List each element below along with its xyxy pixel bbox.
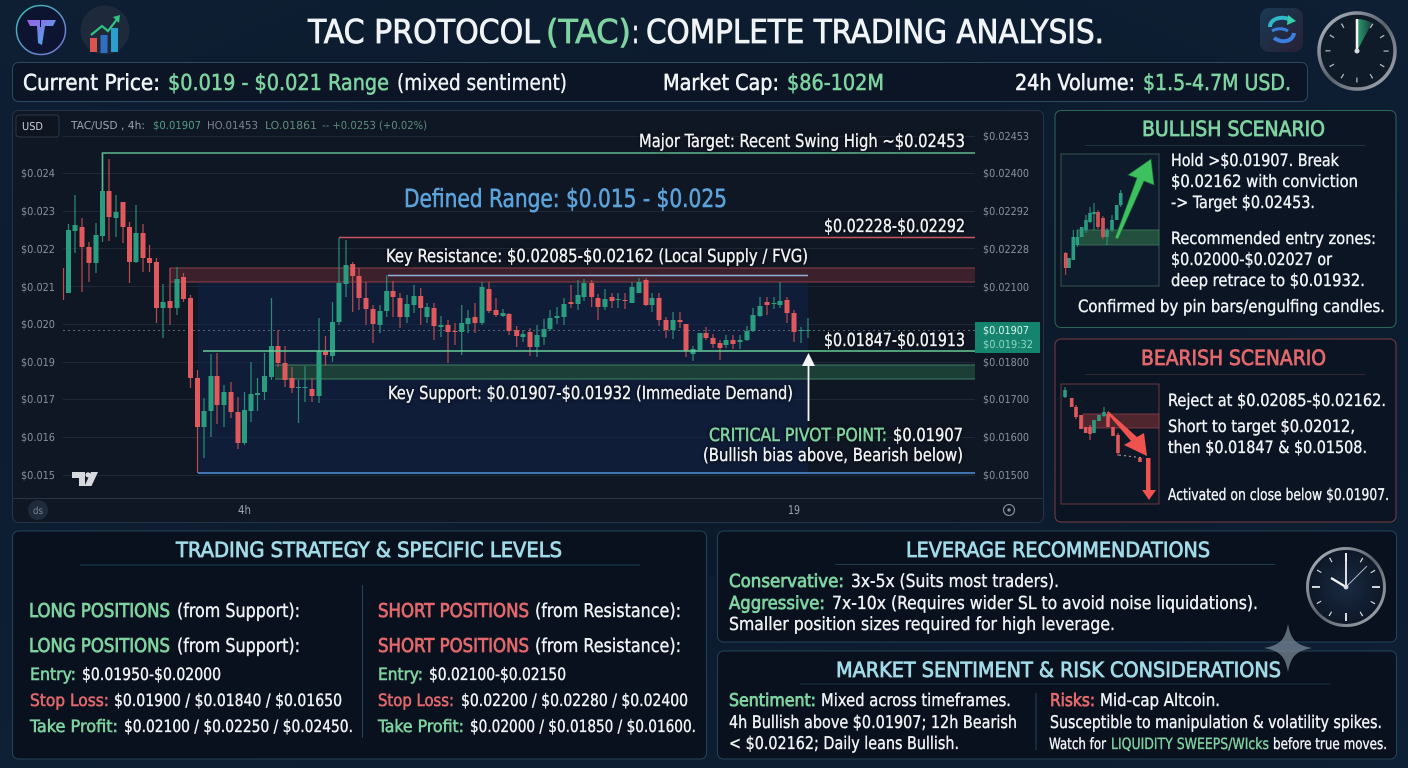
label: major target: Major Target: Recent Swing High ~$0.02453 xyxy=(639,131,965,152)
column: short positions xyxy=(377,600,696,737)
text: leverage tiers: Conservative: xyxy=(729,571,844,592)
text: bullish plan: Confirmed by pin bars/engulfing candles. xyxy=(1078,297,1385,317)
text: leverage tiers: Aggressive: xyxy=(729,593,825,614)
heading: bearish: BEARISH SCENARIO xyxy=(1141,346,1326,370)
column: long positions: (from Support): xyxy=(177,635,300,657)
right price axis: $0.01800 xyxy=(983,356,1029,369)
column: short positions: SHORT POSITIONS xyxy=(378,600,529,622)
panel: bearish scenario xyxy=(1055,339,1396,522)
chart ticker header: LO.01861 xyxy=(265,119,317,132)
candlesticks xyxy=(64,153,808,473)
chart ticker header: $0.01907 xyxy=(153,119,201,132)
panel: price summary bar: $86-102M xyxy=(787,71,884,96)
left price axis xyxy=(21,167,55,482)
right price axis: $0.02400 xyxy=(983,167,1029,180)
icon: sparkle star xyxy=(1264,624,1312,672)
chart ticker header: TAC/USD , 4h: xyxy=(70,119,145,132)
panel: price summary bar: 24h Volume: xyxy=(1015,71,1135,96)
right price axis: $0.02100 xyxy=(983,281,1029,294)
column: long positions xyxy=(29,600,353,737)
column: short positions: Entry: xyxy=(378,665,423,685)
text: bearish plan xyxy=(1168,391,1389,504)
panel: price chart xyxy=(12,110,1044,522)
heading: sentiment and risk: MARKET SENTIMENT & RISK CONSIDERATIONS xyxy=(836,658,1281,682)
left price axis: $0.019 xyxy=(21,356,55,369)
column: long positions: Entry: xyxy=(30,665,76,685)
time axis: ds xyxy=(33,506,43,517)
panel: market sentiment and risk xyxy=(718,651,1396,759)
right price axis xyxy=(983,130,1029,482)
chart ticker header: -- +0.0253 (+0.02%) xyxy=(322,119,427,132)
icon: gauge dial xyxy=(1319,13,1395,89)
panel: trading strategy xyxy=(12,531,706,759)
time axis xyxy=(28,500,1014,520)
defined range shading xyxy=(198,283,808,473)
text: risks: Watch for xyxy=(1049,735,1106,753)
left price axis: $0.015 xyxy=(21,469,55,482)
arrow: bearish drop xyxy=(1142,458,1156,500)
text: risks: Risks: xyxy=(1050,691,1095,711)
currency selector: USD xyxy=(22,120,43,133)
mini chart: bearish breakdown xyxy=(1061,384,1159,504)
text: risks: before true moves. xyxy=(1273,735,1387,753)
panel: leverage recommendations xyxy=(718,531,1396,642)
callout: critical pivot point: $0.01907 xyxy=(893,425,963,446)
text: sentiment: Mixed across timeframes. xyxy=(821,691,1011,711)
column: short positions: SHORT POSITIONS xyxy=(378,635,529,657)
title: : xyxy=(632,12,639,51)
text: bullish plan xyxy=(1078,151,1385,317)
text: sentiment xyxy=(729,691,1017,754)
icon: refresh app xyxy=(1260,8,1303,52)
label: key resistance: Key Resistance: $0.02085-$0.02162 (Local Supply / FVG) xyxy=(386,246,808,267)
icon: growth bar chart xyxy=(80,6,130,54)
title: TAC PROTOCOL xyxy=(307,12,540,51)
column: long positions: $0.01900 / $0.01840 / $0.01650 xyxy=(114,691,342,711)
right price axis: $0.02228 xyxy=(983,243,1029,256)
callout: critical pivot point: (Bullish bias above, Bearish below) xyxy=(703,445,963,466)
column: long positions: LONG POSITIONS xyxy=(29,635,170,657)
text: sentiment: Sentiment: xyxy=(729,691,816,711)
label: upper resistance: $0.02228-$0.02292 xyxy=(824,216,965,237)
logo: TAC token xyxy=(16,6,66,54)
title: (TAC) xyxy=(546,12,631,51)
text: sentiment: 4h Bullish above $0.01907; 12h Bearish xyxy=(729,713,1017,733)
label: defined range: Defined Range: $0.015 - $0.025 xyxy=(404,184,727,213)
left price axis: $0.023 xyxy=(21,205,55,218)
text: bullish plan: Hold >$0.01907. Break xyxy=(1171,151,1339,171)
left price axis: $0.021 xyxy=(21,281,55,294)
column: short positions: $0.02100-$0.02150 xyxy=(429,665,566,685)
left price axis: $0.016 xyxy=(21,431,55,444)
panel: price summary bar: $1.5-4.7M USD. xyxy=(1143,71,1291,96)
heading: bullish: BULLISH SCENARIO xyxy=(1142,117,1325,141)
arrow: bearish reject xyxy=(1107,411,1147,456)
panel: bullish scenario xyxy=(1055,110,1396,328)
arrow: bullish xyxy=(1115,159,1154,239)
icon: clock xyxy=(1308,548,1384,626)
left price axis: $0.017 xyxy=(21,393,55,406)
text: leverage tiers: 3x-5x (Suits most traders). xyxy=(851,571,1059,592)
right price axis: $0.01500 xyxy=(983,469,1029,482)
panel: price summary bar xyxy=(12,62,1308,102)
column: short positions: (from Resistance): xyxy=(535,635,681,657)
text: bullish plan: -> Target $0.02453. xyxy=(1171,193,1315,213)
panel: price summary bar: $0.019 - $0.021 Range xyxy=(168,71,389,96)
pivot line xyxy=(203,350,975,352)
current price tag: $0.01907 xyxy=(983,324,1029,337)
column: long positions: Take Profit: xyxy=(29,717,118,737)
panel: price summary bar: (mixed sentiment) xyxy=(397,71,567,96)
heading: leverage: LEVERAGE RECOMMENDATIONS xyxy=(906,538,1210,562)
left price axis: $0.024 xyxy=(21,167,55,180)
panel: price summary bar: Market Cap: xyxy=(663,71,779,96)
text: leverage tiers: 7x-10x (Requires wider SL to avoid noise liquidations). xyxy=(832,593,1258,614)
right price axis: $0.01700 xyxy=(983,393,1029,406)
column: long positions: $0.02100 / $0.02250 / $0.02450. xyxy=(124,717,353,737)
left price axis: $0.022 xyxy=(21,243,55,256)
text: bearish plan: Reject at $0.02085-$0.02162. xyxy=(1168,391,1386,411)
current price tag xyxy=(975,322,1040,353)
right price axis: $0.02453 xyxy=(983,130,1029,143)
heading: trading strategy: TRADING STRATEGY & SPECIFIC LEVELS xyxy=(175,538,562,562)
major target line xyxy=(102,153,975,191)
text: leverage tiers xyxy=(729,571,1258,635)
mini chart: bullish breakout xyxy=(1061,154,1159,286)
left price axis: $0.020 xyxy=(21,318,55,331)
text: bearish plan: Short to target $0.02012, xyxy=(1168,417,1355,437)
text: bullish plan: deep retrace to $0.01932. xyxy=(1171,271,1365,291)
text: sentiment: < $0.02162; Daily leans Bullish. xyxy=(729,734,959,754)
column: short positions: $0.02200 / $0.02280 / $0.02400 xyxy=(461,691,688,711)
right price axis: $0.02292 xyxy=(983,205,1029,218)
callout: critical pivot point xyxy=(703,425,963,466)
current price tag: $0.019:32 xyxy=(983,338,1033,351)
column: long positions: Stop Loss: xyxy=(30,691,109,711)
column: long positions: $0.01950-$0.02000 xyxy=(82,665,221,685)
column: short positions: $0.02000 / $0.01850 / $0.01600. xyxy=(470,717,696,737)
time axis: 19 xyxy=(788,503,800,517)
text: bullish plan: Recommended entry zones: xyxy=(1171,229,1376,249)
chart ticker header xyxy=(70,119,427,132)
column: short positions: Stop Loss: xyxy=(378,691,454,711)
label: lower level: $0.01847-$0.01913 xyxy=(824,330,965,351)
resistance zone xyxy=(170,268,975,300)
time axis: 4h xyxy=(238,503,251,517)
right price axis: $0.01600 xyxy=(983,431,1029,444)
text: bullish plan: $0.02162 with conviction xyxy=(1171,172,1358,192)
panel: price summary bar: Current Price: xyxy=(23,71,160,96)
column: long positions: (from Support): xyxy=(177,600,300,622)
text: bearish plan: then $0.01847 & $0.01508. xyxy=(1168,438,1367,458)
support zone xyxy=(275,365,975,379)
callout: critical pivot point: CRITICAL PIVOT POINT: xyxy=(709,425,887,446)
chart ticker header: HO.01453 xyxy=(207,119,258,132)
column: short positions: (from Resistance): xyxy=(535,600,681,622)
range top line xyxy=(388,274,808,276)
title: COMPLETE TRADING ANALYSIS. xyxy=(646,12,1104,51)
arrow: pivot pointer xyxy=(802,353,815,421)
title xyxy=(307,12,1104,51)
upper resistance line xyxy=(339,236,975,238)
range floor line xyxy=(198,472,975,474)
text: risks: LIQUIDITY SWEEPS/WIcks xyxy=(1111,735,1269,753)
text: risks: Mid-cap Altcoin. xyxy=(1100,691,1220,711)
text: bullish plan: $0.02000-$0.02027 or xyxy=(1171,250,1333,270)
text: leverage tiers: Smaller position sizes required for high leverage. xyxy=(729,614,1115,635)
label: key support: Key Support: $0.01907-$0.01932 (Immediate Demand) xyxy=(388,383,793,404)
icon: chart platform logo xyxy=(72,472,98,486)
column: short positions: Take Profit: xyxy=(377,717,464,737)
column: long positions: LONG POSITIONS xyxy=(29,600,170,622)
currency selector xyxy=(16,115,59,137)
text: risks xyxy=(1049,691,1387,753)
